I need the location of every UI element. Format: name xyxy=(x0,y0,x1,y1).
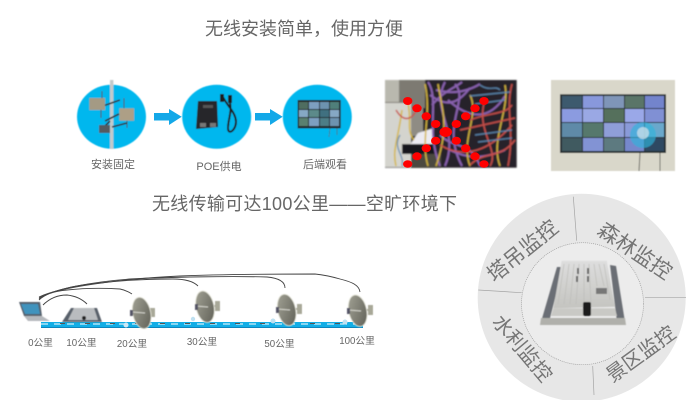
heading: wireless range: 无线传输可达100公里——空旷环境下 xyxy=(152,194,457,214)
blue ground strip xyxy=(41,317,363,328)
distance labels: 20公里 xyxy=(117,338,147,350)
icon: dish 20 km xyxy=(130,295,154,331)
icon: blue circle with mast and radios xyxy=(77,80,146,149)
icon: blue circle with monitor xyxy=(283,85,352,149)
icon: radio device xyxy=(62,308,102,322)
arrow: install to POE xyxy=(154,109,182,125)
icon: dish 100 km xyxy=(346,293,372,328)
distance labels: 10公里 xyxy=(66,337,97,349)
inner circle xyxy=(522,243,644,365)
icon: blue circle with POE adapter xyxy=(182,85,251,149)
icon: dish 50 km xyxy=(275,292,301,328)
title: easy installation: 无线安装简单，使用方便 xyxy=(205,19,403,39)
photo: wall-mounted video wall xyxy=(551,80,675,171)
icon: laptop xyxy=(19,302,50,321)
distance labels: 30公里 xyxy=(187,336,217,348)
distance labels: 50公里 xyxy=(264,338,295,350)
distance labels xyxy=(28,335,375,350)
label: POE power: POE供电 xyxy=(196,159,242,173)
distance labels: 0公里 xyxy=(28,337,53,349)
arrow: POE to viewing xyxy=(255,109,283,125)
step: back-end viewing xyxy=(283,85,352,171)
icon: dish 30 km xyxy=(193,289,219,324)
distance labels: 100公里 xyxy=(339,335,375,347)
step: POE power xyxy=(182,85,251,173)
label: tower monitoring: 塔吊监控 xyxy=(483,216,563,287)
markers: red dots xyxy=(403,97,489,168)
diagram: transmission distance xyxy=(19,274,375,350)
label: back-end viewing: 后端观看 xyxy=(303,157,347,171)
icon: outdoor radio device xyxy=(540,261,626,325)
label: install and mount: 安装固定 xyxy=(91,157,135,171)
wheel: application scenarios xyxy=(478,194,686,400)
signal arcs xyxy=(39,274,360,305)
label: water monitoring: 水利监控 xyxy=(487,311,556,387)
label: scenic monitoring: 景区监控 xyxy=(602,322,680,387)
label: forest monitoring: 森林监控 xyxy=(593,219,676,285)
segment dividers xyxy=(478,197,686,395)
step: install and mount xyxy=(77,80,146,171)
outer ring xyxy=(478,194,686,400)
photo: messy cabling with red markers xyxy=(385,80,517,168)
